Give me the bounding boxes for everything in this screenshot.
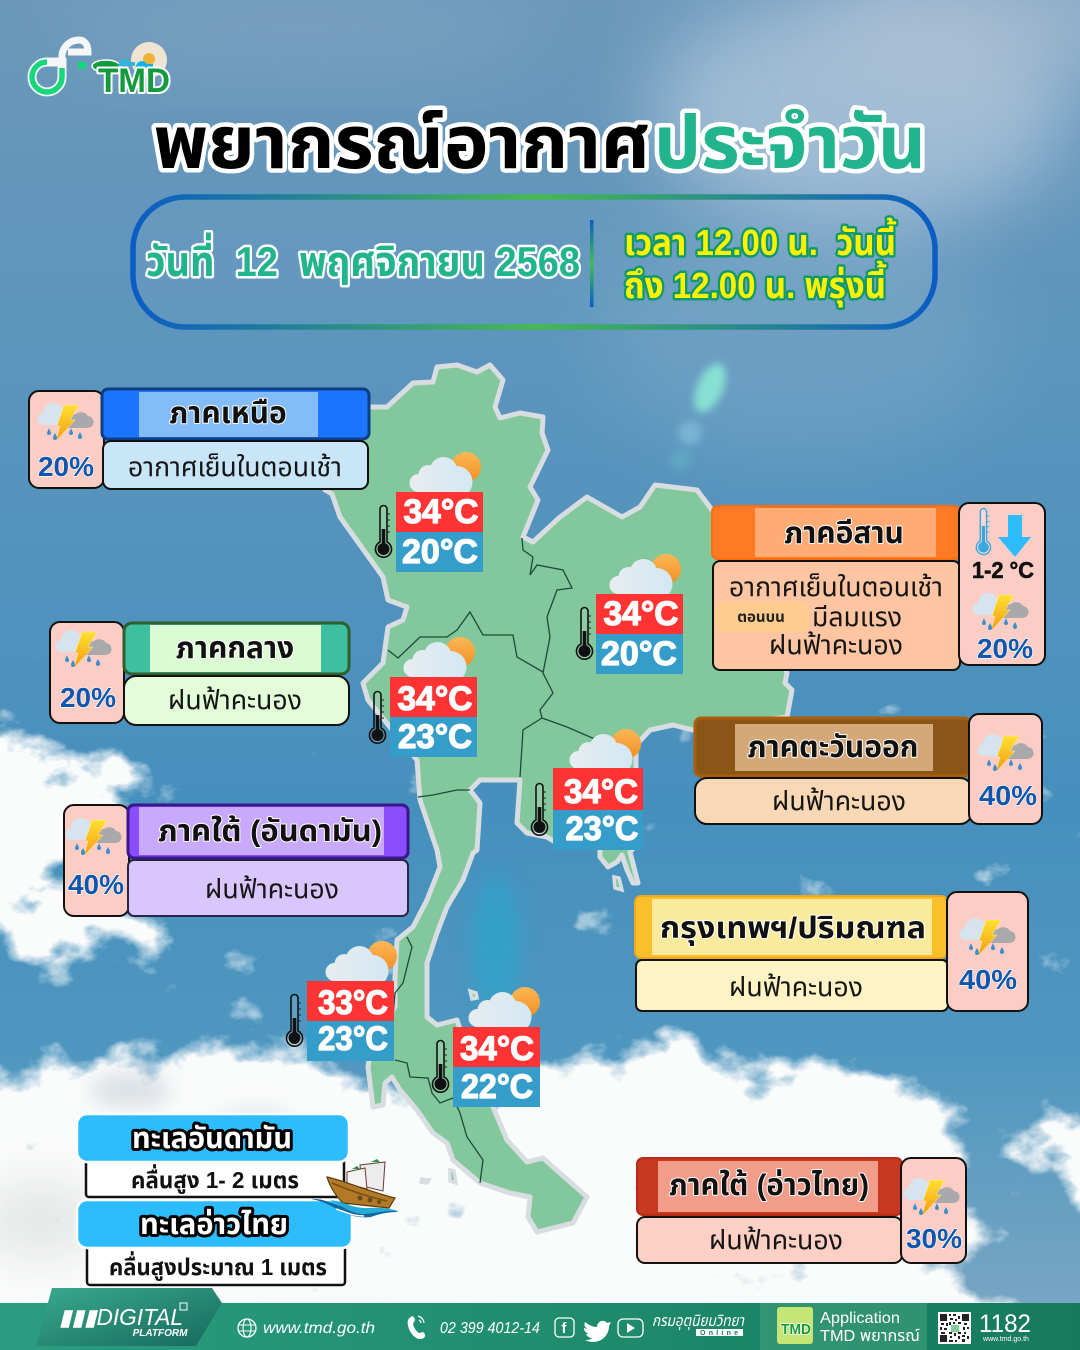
validity time text: เวลา 12.00 น. วันนี้ — [624, 217, 897, 263]
forecast: south east: 34°C — [460, 1030, 534, 1068]
logo: DE — [32, 40, 88, 92]
contact info: www.tmd.go.th — [263, 1320, 375, 1337]
panel: east: ภาคตะวันออก — [748, 731, 918, 764]
hotline 1182: 1182 — [979, 1310, 1031, 1338]
title: พยากรณ์อากาศ — [154, 101, 650, 184]
forecast: north: 20°C — [402, 533, 478, 571]
panel: south gulf — [637, 1158, 966, 1263]
contact info: Online — [700, 1330, 738, 1337]
panel: bangkok: 40% — [959, 964, 1017, 995]
panel: sea gulf: ทะเลอ่าวไทย — [140, 1209, 288, 1241]
background clouds — [0, 695, 1080, 1350]
panel: south andaman: ฝนฟ้าคะนอง — [205, 874, 339, 904]
panel: north: ภาคเหนือ — [169, 397, 287, 430]
hotline 1182: www.tmd.go.th — [982, 1336, 1029, 1343]
decoration: lens flare — [669, 359, 732, 471]
app tile — [777, 1307, 920, 1345]
forecast: south east: 22°C — [461, 1068, 533, 1106]
panel: sea andaman: ทะเลอันดามัน — [132, 1123, 292, 1155]
validity time text — [624, 217, 897, 307]
panel: northeast: 20% — [977, 633, 1033, 664]
validity time text: ถึง 12.00 น. พรุ่งนี้ — [624, 260, 887, 307]
digital platform tab — [36, 1288, 222, 1346]
panel: east — [695, 714, 1042, 824]
panel: northeast: มีลมแรง — [812, 602, 902, 632]
panel: bangkok: กรุงเทพฯ/ปริมณฑล — [660, 912, 926, 946]
panel: south andaman — [64, 805, 408, 916]
panel: east: ฝนฟ้าคะนอง — [772, 786, 906, 816]
panel: bangkok: ฝนฟ้าคะนอง — [729, 972, 863, 1002]
date frame — [133, 197, 935, 327]
icon: blue thermometer and down arrow — [976, 509, 1031, 557]
panel: north: 20% — [38, 451, 94, 482]
panel: north: อากาศเย็นในตอนเช้า — [128, 452, 342, 482]
panel: sea gulf: คลื่นสูงประมาณ 1 เมตร — [109, 1251, 327, 1281]
panel: northeast — [712, 503, 1045, 670]
digital platform tab: PLATFORM — [133, 1328, 188, 1339]
panel: bangkok — [635, 892, 1028, 1011]
panel: northeast: 1-2 °C — [972, 557, 1034, 583]
forecast: east — [532, 729, 643, 850]
panel: northeast: อากาศเย็นในตอนเช้า — [729, 572, 943, 602]
forecast: northeast: 34°C — [604, 595, 678, 633]
panel: northeast: ฝนฟ้าคะนอง — [769, 630, 903, 660]
QR code — [938, 1312, 971, 1344]
map of Thailand — [325, 365, 792, 1232]
panel: sea andaman — [77, 1114, 349, 1197]
panel: central: 20% — [60, 682, 116, 713]
forecast: northeast — [576, 554, 683, 674]
forecast: northeast: 20°C — [601, 635, 677, 673]
panel: south gulf: 30% — [906, 1223, 962, 1254]
app tile: TMD — [781, 1321, 811, 1338]
forecast: south east — [432, 987, 540, 1107]
panel: central — [50, 622, 349, 725]
panel: east: 40% — [979, 780, 1037, 811]
panel: north — [29, 389, 369, 489]
panel: central: ฝนฟ้าคะนอง — [168, 685, 302, 715]
contact info: กรมอุตุนิยมวิทยา — [652, 1313, 745, 1331]
forecast: central — [370, 637, 477, 757]
regional borders — [388, 538, 633, 1183]
panel: central: ภาคกลาง — [176, 632, 294, 665]
contact info — [238, 1313, 745, 1342]
date text: วันที่ 12 พฤศจิกายน 2568 — [146, 232, 580, 285]
forecast: south west — [286, 941, 397, 1061]
forecast: south west: 23°C — [318, 1020, 388, 1058]
panel: northeast: ตอนบน — [737, 609, 785, 626]
panel: south gulf: ฝนฟ้าคะนอง — [709, 1225, 843, 1255]
contact info: f — [562, 1320, 568, 1337]
forecast: north — [376, 452, 483, 572]
contact info: 02 399 4012-14 — [440, 1320, 540, 1337]
logo: TMD: TMD — [98, 62, 170, 100]
logo: TMD — [92, 42, 170, 100]
forecast: east: 34°C — [564, 773, 638, 811]
digital platform tab: ▮▮▮DIGITAL — [59, 1304, 183, 1330]
title — [154, 101, 926, 184]
forecast: east: 23°C — [566, 810, 638, 848]
panel: northeast: ภาคอีสาน — [784, 517, 904, 550]
panel: south gulf: ภาคใต้ (อ่าวไทย) — [669, 1169, 869, 1202]
panel: sea gulf — [77, 1200, 352, 1285]
icon: ship — [311, 1159, 399, 1217]
forecast: central: 23°C — [398, 718, 472, 756]
app tile: TMD พยากรณ์ — [820, 1328, 920, 1345]
islands — [421, 877, 622, 1183]
footer bar — [0, 1288, 1080, 1350]
app tile: Application — [820, 1310, 900, 1327]
panel: south andaman: 40% — [68, 869, 124, 900]
forecast: central: 34°C — [398, 680, 472, 718]
forecast: north: 34°C — [404, 493, 478, 531]
forecast: south west: 33°C — [318, 984, 388, 1022]
title: ประจำวัน — [654, 101, 926, 184]
panel: sea andaman: คลื่นสูง 1- 2 เมตร — [131, 1164, 299, 1194]
panel: south andaman: ภาคใต้ (อันดามัน) — [158, 815, 382, 848]
